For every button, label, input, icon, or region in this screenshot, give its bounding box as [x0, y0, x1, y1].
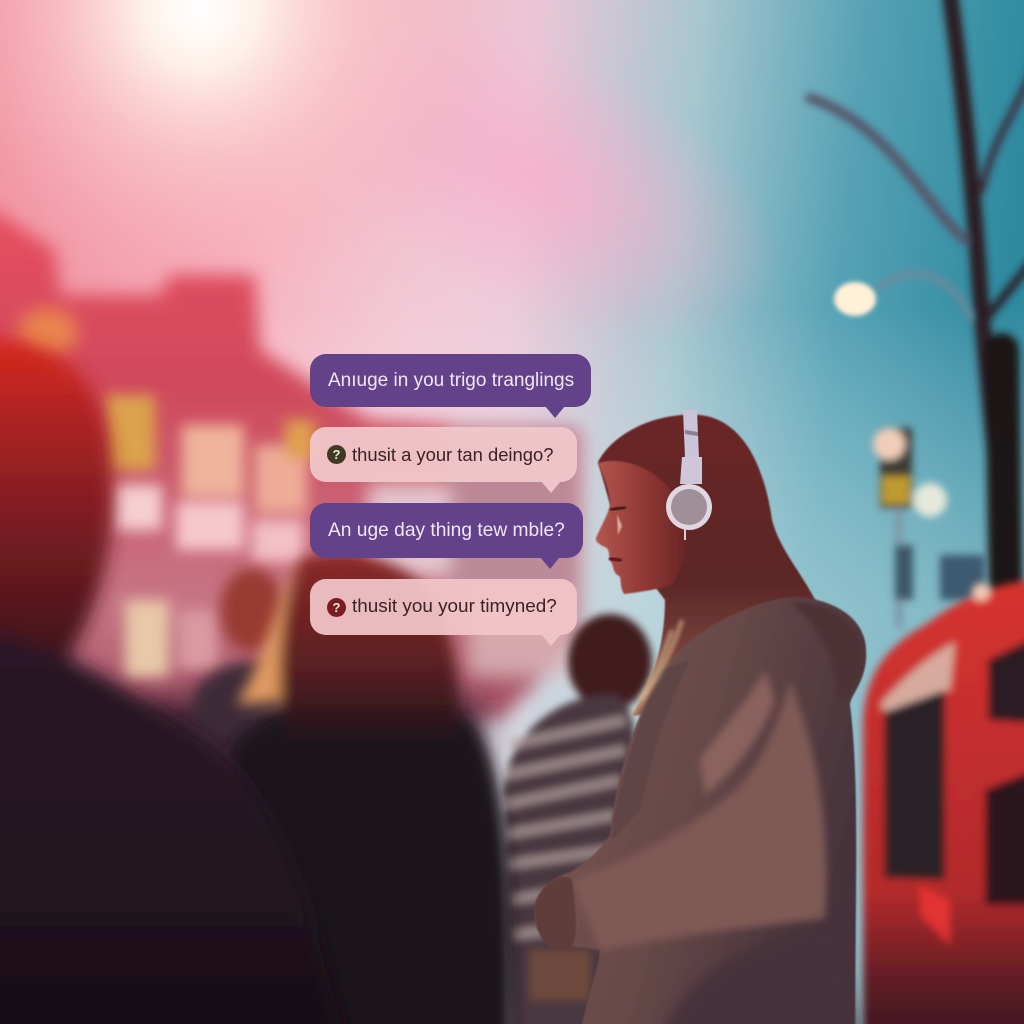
red bus	[863, 578, 1024, 1024]
speech bubble 3	[310, 503, 583, 558]
woman: face	[596, 461, 686, 594]
center person with long hair	[230, 553, 513, 1024]
foreground person left	[0, 339, 350, 1024]
hand	[535, 877, 576, 951]
speech bubble 4	[310, 579, 577, 635]
light blonde hair strands	[632, 620, 682, 716]
hood shading	[790, 602, 862, 705]
headphones	[666, 410, 712, 540]
blurred red building on left	[0, 200, 580, 740]
jacket sleeve light	[572, 680, 826, 950]
speech bubble 4: thusit you your timyned?	[352, 596, 557, 617]
woman: hair	[598, 415, 818, 716]
speech bubble 4: ?	[333, 600, 340, 614]
woman: eye and lips	[609, 507, 626, 561]
speech bubble 2: ?	[333, 447, 340, 462]
speech bubble 3: An uge day thing tew mble?	[328, 520, 565, 540]
lower background crowd haze	[140, 700, 480, 1024]
background person with striped sweater	[503, 614, 652, 1024]
zipper shirt strip	[612, 660, 690, 840]
speech bubble 2: thusit a your tan deingo?	[352, 444, 553, 464]
tree and branches	[810, 0, 1024, 600]
speech bubble 2	[310, 427, 577, 482]
background person beside building	[190, 568, 290, 780]
sun glare on building corner	[18, 308, 78, 356]
street lamp	[834, 274, 972, 320]
woman: hood and jacket	[535, 597, 866, 1024]
building windows	[105, 395, 315, 678]
traffic light	[873, 428, 985, 628]
speech bubble 1	[310, 354, 591, 407]
speech bubble 1: Anıuge in you trigo tranglings	[328, 370, 574, 390]
